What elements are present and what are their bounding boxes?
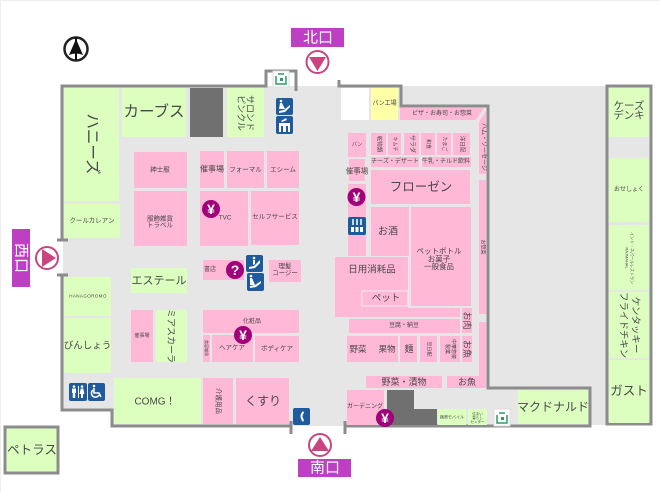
shop: セルフサービス — [251, 191, 299, 245]
shop: 理髪 コージー: コージー — [272, 269, 298, 277]
shop: ガーデニング: ガーデニング — [347, 402, 383, 410]
shop: ガスト: ガスト — [610, 384, 648, 398]
icon: ATM yen south — [376, 409, 394, 427]
shop: お魚 small — [462, 336, 473, 362]
shop: 理髪 コージー — [269, 260, 301, 282]
shop: 日用消耗品 — [335, 257, 460, 317]
shop: 中華惣菜: 中華惣菜 — [450, 339, 457, 359]
right building wall — [607, 86, 651, 424]
shop: 野菜・漬物 — [366, 376, 442, 388]
shop: ピザ・お寿司・お惣菜: ピザ・お寿司・お惣菜 — [412, 109, 472, 117]
icon: restrooms — [69, 383, 87, 401]
shop: クールカレアン — [64, 204, 120, 238]
shop: お魚: お魚 — [458, 376, 476, 387]
shop: 住まい暮らしセンター: 住まい — [472, 411, 483, 416]
shop: 豆日配 — [420, 336, 437, 362]
icon: south emergency exit — [494, 409, 510, 426]
shop: 牛乳・チルド飲料: 牛乳・チルド飲料 — [422, 157, 470, 165]
shop: 日用消耗品: 日用消耗品 — [348, 264, 396, 276]
shop: 服飾雑貨 トラベル: トラベル — [147, 221, 174, 229]
shop: 紳士服 — [134, 152, 187, 188]
shop: カーブス — [122, 88, 186, 137]
north entrance: 北口 — [303, 30, 333, 46]
shop: フローゼン — [371, 170, 470, 204]
shop: ヘアケア — [212, 335, 253, 362]
shop: 紳士服: 紳士服 — [150, 164, 170, 174]
compass — [64, 37, 88, 60]
shop: 催事場 small — [131, 310, 153, 362]
shop: 中華惣菜: 製菓 — [444, 344, 451, 354]
shop: 牛乳・チルド飲料 — [422, 157, 471, 167]
shop: 麺 — [400, 336, 417, 362]
icon: information — [226, 261, 244, 279]
shop: 美容雑貨 — [203, 335, 210, 362]
icon: escalator — [276, 98, 293, 115]
shop: おせしょく — [609, 158, 649, 222]
shop: ペット: ペット — [372, 293, 400, 304]
shop: ペットボトル お菓子 一般食品: 一般食品 — [424, 261, 454, 271]
shop: カーブス: カーブス — [123, 102, 185, 120]
shop: 麺: 麺 — [404, 343, 414, 354]
icon: ATM yen south: ¥ — [381, 410, 389, 426]
shop: 書店 — [203, 260, 244, 280]
shop: 催事場 small: 催事場 — [134, 332, 150, 339]
shop: ハニーズ — [64, 88, 119, 201]
shop: エシーム — [267, 151, 299, 188]
icon: information: ? — [231, 262, 239, 278]
store floor — [63, 86, 652, 426]
shop: 乾物 — [371, 133, 386, 155]
shop: 住まい暮らしセンター: 暮らし — [472, 415, 483, 420]
shop: サロンドピンクル: サロンド — [245, 95, 255, 131]
shop: 乾物: 乾物類 — [376, 136, 384, 153]
icon: telephone — [293, 408, 310, 425]
shop: 化粧品 — [203, 310, 299, 333]
shop: 豆腐・納豆 — [349, 319, 460, 333]
shop: パン — [348, 133, 366, 157]
shop: 携帯モバイル: 携帯モバイル — [440, 414, 464, 420]
icon: escalator up — [246, 255, 263, 272]
shop: インド・ネパールレストラン: RAJMAHAL — [624, 247, 630, 269]
shop: セルフサービス: セルフサービス — [252, 212, 298, 220]
shop: 野菜 果物 — [347, 336, 398, 362]
shop: ケンタッキーフライドチキン: フライドチキン — [618, 292, 628, 358]
shop: チーズ・デザート: チーズ・デザート — [371, 157, 419, 165]
shop: お魚 small: お魚 — [462, 340, 473, 358]
shop: マクドナルド — [517, 390, 589, 424]
shop: 化粧品: 化粧品 — [243, 317, 261, 325]
shop: ペット — [362, 291, 408, 306]
shop: 催事場 food: 催事場 — [346, 166, 369, 176]
building walls — [57, 71, 590, 434]
shop: くすり — [236, 378, 289, 424]
shop: ケンタッキーフライドチキン: ケンタッキー — [630, 297, 640, 353]
shop: キムチ — [388, 133, 401, 155]
shop: びんしょう: びんしょう — [64, 340, 111, 352]
shop: ガーデニング — [347, 390, 384, 425]
shop: サロンドピンクル — [227, 88, 264, 137]
shop: インド・ネパールレストラン: インド・ネパールレストラン — [630, 232, 636, 284]
shop: お酒 — [371, 207, 409, 256]
shop: 服飾雑貨 トラベル — [134, 191, 187, 246]
shop: くすり: くすり — [245, 394, 281, 408]
shop: ハム・ソーセージ — [479, 111, 487, 174]
shop: サラダ — [404, 133, 419, 155]
shop: エシーム: エシーム — [270, 166, 296, 174]
shop: キムチ: キムチ — [392, 136, 398, 152]
shop: ハム・ソーセージ: ハム・ソーセージ — [480, 123, 487, 171]
shop: ケーズデンキ: デンキ — [613, 108, 645, 122]
icon: water — [348, 217, 366, 235]
shop: 書店: 書店 — [204, 265, 216, 273]
shop: ピザ・お寿司・お惣菜 — [400, 108, 484, 120]
shop: aisle lower — [479, 322, 486, 376]
blank room — [341, 88, 369, 120]
shop: ペトラス — [5, 427, 58, 473]
shop: サロンドピンクル: ピンクル — [236, 95, 246, 131]
south entrance — [298, 434, 351, 477]
shop: 和食: 和食 — [425, 139, 432, 149]
shop: パン: パン — [352, 142, 362, 148]
shop: フォーマル — [227, 151, 264, 188]
shop: 理髪 コージー: 理髪 — [278, 261, 292, 270]
shop: 野菜 果物: 果物 — [378, 344, 396, 354]
icon: accessible toilet — [88, 383, 105, 401]
shop: お惣菜 aisle: お惣菜 — [480, 239, 486, 255]
shop: TVC — [200, 191, 248, 246]
icon: ATM yen food — [348, 188, 366, 206]
west entrance — [12, 229, 58, 287]
shop: 洋日配 — [453, 133, 470, 155]
shop: お肉: お肉 — [462, 311, 473, 330]
shop: ペットボトル お菓子 一般食品 — [411, 207, 471, 306]
shop: TVC: TVC — [218, 214, 232, 222]
icon: ATM yen food: ¥ — [353, 189, 361, 205]
shop: お肉 — [462, 308, 473, 333]
shop: サラダ: サラダ — [408, 135, 416, 153]
shop: おせしょく: おせしょく — [614, 186, 644, 193]
shop: ボディケア: ボディケア — [261, 344, 294, 352]
icon: ATM yen — [202, 200, 220, 218]
icon: elevator — [276, 116, 293, 134]
icon: ATM yen cosmetics — [234, 326, 252, 344]
shop: エステール: エステール — [132, 275, 186, 287]
shop: たまご: たまご — [441, 137, 448, 151]
shop: クールカレアン: クールカレアン — [69, 216, 115, 224]
shop: お惣菜 aisle — [479, 180, 486, 314]
icon: escalator down — [247, 273, 264, 291]
shop: 催事場 — [200, 151, 224, 188]
south entrance: 南口 — [310, 460, 340, 476]
shop: ケンタッキーフライドチキン — [609, 292, 649, 358]
shop: お魚 — [447, 376, 486, 388]
shop: 豆日配: 豆日配 — [426, 341, 432, 357]
shop: 美容雑貨: 美容雑貨 — [204, 340, 210, 356]
shop: エステール — [131, 268, 187, 293]
shop: 携帯モバイル — [438, 409, 466, 425]
shop: ハニーズ: ハニーズ — [84, 113, 102, 175]
icon: ATM yen: ¥ — [207, 201, 215, 217]
shop: パン工場: パン工場 — [372, 99, 397, 107]
shop: 和食 — [421, 133, 435, 155]
shop: お酒: お酒 — [378, 226, 398, 238]
north entrance — [291, 28, 344, 73]
shop: インド・ネパールレストラン — [609, 225, 649, 290]
shop: ボディケア — [255, 336, 299, 362]
shop: ペットボトル お菓子 一般食品: お菓子 — [428, 254, 451, 264]
shop: 住まい暮らしセンター: センター — [470, 419, 485, 424]
shop: 通路売場 — [348, 184, 366, 256]
shop: 催事場 food — [346, 159, 369, 181]
shop: 洋日配: 洋日配 — [458, 136, 466, 153]
icon: north emergency exit — [273, 71, 289, 87]
shop: 介護用品 — [203, 378, 233, 424]
shop: パン工場 — [371, 88, 398, 120]
shop: ペトラス: ペトラス — [7, 443, 57, 457]
icon: ATM yen cosmetics: ¥ — [239, 327, 247, 343]
shop: ガスト — [609, 360, 649, 423]
shop: ミアスカーラ — [156, 309, 187, 363]
back room south — [387, 390, 437, 425]
shop: ケーズデンキ — [609, 88, 649, 137]
shop: ペットボトル お菓子 一般食品: ペットボトル — [416, 246, 462, 256]
shop: COMG!: COMG！ — [134, 396, 176, 408]
shop: 豆腐・納豆: 豆腐・納豆 — [389, 321, 419, 329]
shop: 中華惣菜 — [440, 336, 460, 362]
shop: 服飾雑貨 トラベル: 服飾雑貨 — [147, 214, 174, 222]
west entrance: 西口 — [12, 243, 30, 273]
shop: 住まい暮らしセンター — [468, 409, 487, 425]
shop: たまご — [437, 133, 451, 155]
shop: 野菜 果物: 野菜 — [349, 344, 367, 354]
shop: HANAGOROMO — [64, 277, 111, 316]
shop: 介護用品: 介護用品 — [214, 388, 224, 414]
shop: COMG! — [114, 378, 201, 424]
shop: HANAGOROMO: HANAGOROMO — [69, 294, 107, 298]
back room — [190, 88, 223, 137]
shop: 催事場: 催事場 — [200, 164, 224, 174]
shop: フォーマル: フォーマル — [229, 166, 262, 174]
shop: びんしょう — [64, 318, 111, 373]
shop: チーズ・デザート — [371, 157, 419, 167]
shop: マクドナルド: マクドナルド — [517, 400, 589, 414]
shop: ミアスカーラ: ミアスカーラ — [166, 309, 176, 363]
shop: ヘアケア: ヘアケア — [219, 344, 246, 352]
shop: フローゼン: フローゼン — [390, 180, 452, 194]
shop: ケーズデンキ: ケーズ — [614, 99, 644, 112]
shop: 野菜・漬物: 野菜・漬物 — [381, 376, 427, 387]
